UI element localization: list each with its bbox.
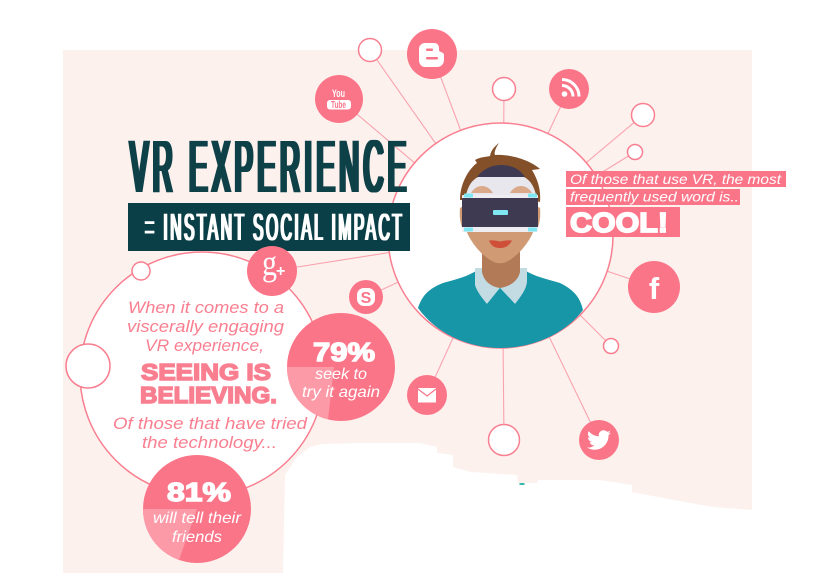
text block: seeing is believing: the technology... bbox=[142, 434, 277, 452]
text block: seeing is believing: SEEING IS bbox=[141, 359, 271, 385]
panel: central portrait circle bbox=[388, 123, 613, 348]
ears bbox=[460, 205, 540, 232]
stray teal speck bbox=[519, 483, 525, 485]
icon: Google Plus: + bbox=[276, 263, 285, 280]
text block: seeing is believing: When it comes to a bbox=[128, 299, 284, 317]
sweater neckline bbox=[487, 288, 515, 312]
head strap bbox=[466, 177, 536, 195]
stat: 79% seek to try it again: 79% bbox=[313, 337, 375, 367]
empty node, top centre bbox=[492, 78, 516, 100]
empty node, bottom bbox=[488, 424, 520, 456]
background panel bbox=[63, 50, 752, 573]
icon: Skype: S bbox=[361, 290, 372, 307]
stat: 81% will tell their friends: 81% bbox=[167, 477, 231, 507]
stat: 81% will tell their friends bbox=[143, 455, 251, 563]
headband bbox=[477, 165, 525, 177]
icon: YouTube bbox=[315, 75, 363, 123]
stat: 79% seek to try it again bbox=[287, 313, 395, 421]
visor lights bbox=[464, 194, 537, 232]
text block: seeing is believing bbox=[113, 299, 308, 452]
panel: seeing is believing circle bbox=[80, 252, 324, 496]
visor bbox=[462, 195, 538, 232]
small empty circle node, upper left bbox=[132, 262, 150, 280]
text block: seeing is believing: viscerally engaging bbox=[127, 318, 285, 336]
callout: most frequently used word bbox=[566, 171, 786, 238]
stat: 79% seek to try it again: seek to bbox=[315, 366, 367, 383]
icon: YouTube: You bbox=[332, 88, 345, 100]
connector lines bbox=[272, 50, 654, 440]
icon: Twitter bbox=[579, 420, 619, 460]
empty node, upper right bbox=[632, 104, 654, 126]
neck bbox=[482, 245, 520, 288]
forehead skin patches bbox=[471, 186, 532, 193]
icon: Facebook: f bbox=[649, 271, 660, 306]
icon: Skype bbox=[349, 280, 383, 314]
small empty node, right bbox=[628, 144, 642, 160]
callout: most frequently used word: frequently used word is.. bbox=[570, 190, 739, 204]
stat: 81% will tell their friends: friends bbox=[172, 529, 222, 546]
face bbox=[465, 190, 535, 263]
illustration: person wearing VR headset bbox=[418, 143, 583, 348]
shirt collar bbox=[475, 268, 527, 304]
text block: seeing is believing: VR experience, bbox=[145, 337, 264, 355]
subtitle banner: = INSTANT SOCIAL IMPACT bbox=[145, 207, 404, 249]
icon: Google Plus bbox=[247, 243, 297, 296]
icon: email bbox=[407, 375, 447, 415]
empty node, top bbox=[358, 38, 382, 62]
icon: Blogger bbox=[407, 29, 457, 79]
sweater bbox=[418, 271, 583, 348]
large empty circle node, left bbox=[66, 344, 110, 388]
icon: Facebook bbox=[628, 261, 680, 313]
lips bbox=[489, 240, 512, 248]
hair bbox=[460, 143, 540, 202]
stat: 81% will tell their friends: will tell their bbox=[153, 510, 242, 527]
stat: 79% seek to try it again: try it again bbox=[302, 384, 380, 401]
text block: seeing is believing: Of those that have tried bbox=[113, 415, 308, 433]
title: VR EXPERIENCE bbox=[130, 124, 411, 208]
icon: YouTube: Tube bbox=[331, 100, 346, 111]
text block: seeing is believing: BELIEVING. bbox=[140, 382, 277, 408]
icon: RSS bbox=[549, 69, 589, 109]
callout: most frequently used word: COOL! bbox=[570, 207, 668, 238]
icon: Google Plus: g bbox=[262, 243, 277, 283]
callout: most frequently used word: Of those that use VR, the most bbox=[570, 172, 782, 187]
small empty node, lower right bbox=[604, 338, 618, 354]
